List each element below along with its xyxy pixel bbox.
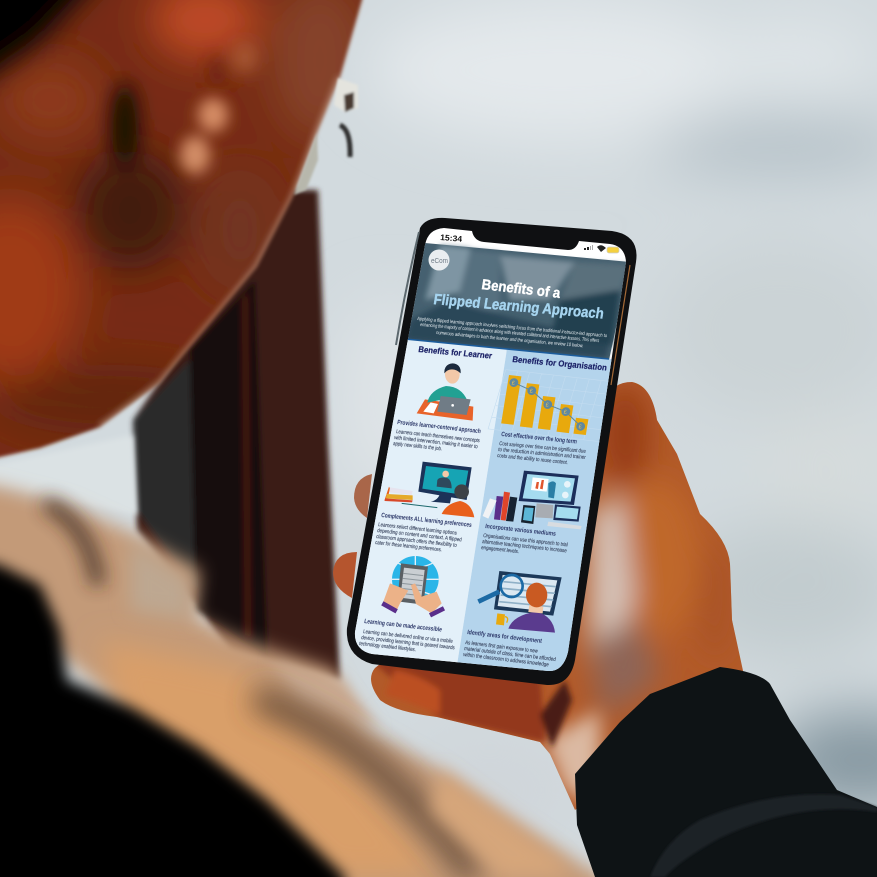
sleeve <box>575 667 877 877</box>
panel: benefits for learner: Learning can be made accessible <box>364 618 443 634</box>
title <box>434 279 604 319</box>
phone body <box>347 218 636 685</box>
icon: tablet and globe <box>382 556 444 615</box>
text block: learning preferences: Learners select different learning options <box>378 522 457 537</box>
status bar: 15:34 <box>440 233 463 244</box>
panel: benefits for organisation: Cost effective over the long term <box>501 431 578 446</box>
phone <box>340 218 640 685</box>
text block: learning preferences: classroom approach offers the flexibility to <box>376 534 457 549</box>
text block: development: within the classroom to address knowledge <box>462 652 549 668</box>
icon: magnifier and monitor <box>478 571 562 633</box>
text block: accessible <box>359 629 455 653</box>
text block: accessible: technology enabled lifestyles. <box>359 641 416 653</box>
text block: learner centred: Learners can teach themselves new concepts <box>396 429 480 444</box>
person: head and ear <box>0 0 380 480</box>
panel: benefits for learner: Provides learner-centered approach <box>397 419 481 435</box>
left fingertips <box>333 474 372 598</box>
hand holding phone <box>333 370 760 820</box>
chart: falling cost bars: £ <box>529 388 533 395</box>
icon: learner with laptop <box>417 363 473 421</box>
text block: mediums: alternative teaching techniques to increase <box>482 539 567 554</box>
intro text: enhancing the majority of content in advance along with elevated collateral and interactive lessons. This offers <box>420 322 600 344</box>
text block: learning preferences <box>375 522 462 553</box>
text block: cost effective <box>497 441 586 466</box>
person: scarf <box>0 480 640 877</box>
chart: falling cost bars <box>488 369 614 442</box>
window frame <box>133 190 340 680</box>
text block: learning preferences: depending on content and context. A flipped <box>377 528 462 543</box>
text block: learner centred: with limited intervention, making it easier to <box>393 435 478 450</box>
panel: header <box>405 243 630 360</box>
text block: development: As learners first gain exposure to new <box>465 640 538 655</box>
title: Flipped Learning Approach <box>432 291 605 322</box>
text block: development: material outside of class, time can be afforded <box>464 646 556 663</box>
logo: eCom <box>431 258 448 265</box>
chart: falling cost bars: £ <box>563 409 567 416</box>
text block: cost effective: Cost savings over time can be significant due <box>499 441 586 455</box>
chart: falling cost bars: £ <box>545 402 549 409</box>
panel: benefits for learner: Complements ALL learning preferences <box>381 512 473 529</box>
icon: devices and books <box>483 471 582 529</box>
text block: learning preferences: cater for these learning preferences. <box>375 540 442 553</box>
panel: benefits for organisation: Benefits for Organisation <box>512 354 608 373</box>
chart: falling cost bars: £ <box>578 424 582 430</box>
icon: online lesson monitor <box>384 462 474 517</box>
intro text: numerous advantages to both the learner and the organisation, we review 10 below. <box>436 330 584 349</box>
title: Benefits of a <box>480 277 562 302</box>
text block: mediums: engagement levels. <box>481 545 519 555</box>
gap of light at neck <box>0 435 137 515</box>
glasses <box>294 78 358 195</box>
intro text <box>417 316 608 349</box>
status bar <box>440 233 619 253</box>
panel: benefits for learner: Benefits for Learner <box>418 344 493 361</box>
text block: accessible: Learning can be delivered online or via a mobile <box>363 629 453 645</box>
chart: falling cost bars: £ <box>511 380 515 387</box>
text block: mediums: Organisations can use this approach to trial <box>483 533 568 548</box>
intro text: Applying a flipped learning approach involves switching focus from the traditional instructor-led approach to <box>417 316 608 339</box>
text block: cost effective: costs and the ability to reuse content. <box>497 453 568 466</box>
logo <box>428 250 450 270</box>
panel: benefits for organisation <box>458 350 612 671</box>
panel: benefits for learner <box>340 339 507 665</box>
person: jacket <box>0 555 345 877</box>
panel: benefits for organisation: Identify areas for development <box>467 629 543 645</box>
gold edge <box>611 265 630 385</box>
screen <box>354 228 626 671</box>
panel: benefits for organisation: Incorporate various mediums <box>485 523 557 538</box>
text block: learner centred <box>393 429 480 452</box>
text block: development <box>462 640 556 668</box>
palm <box>371 382 743 810</box>
header rule <box>405 339 609 359</box>
text block: mediums <box>481 533 568 555</box>
text block: accessible: device, providing learning that is geared towards <box>361 635 455 651</box>
text block: learner centred: apply new skills to the job. <box>393 441 442 452</box>
text block: cost effective: to the reduction in administration and trainer <box>498 447 586 461</box>
